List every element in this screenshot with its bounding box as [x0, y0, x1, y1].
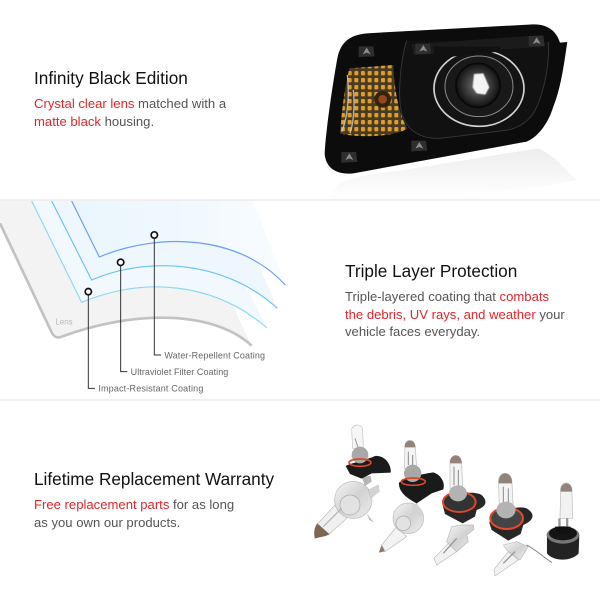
text: Infinity Black Edition body — [34, 96, 226, 129]
impact callout — [85, 288, 203, 394]
ultraviolet layer — [52, 201, 277, 308]
text: Lifetime Replacement Warranty body: as you own our products. — [34, 515, 180, 530]
bulb 5 with socket — [547, 483, 579, 560]
water layer — [72, 201, 285, 285]
lens layer — [0, 201, 252, 346]
H3 bulb — [494, 542, 552, 576]
text: Infinity Black Edition body: Crystal clear lens matched with a — [34, 96, 226, 111]
H4 medium bulb — [379, 503, 424, 553]
text: Infinity Black Edition body: matte black housing. — [34, 114, 154, 129]
water callout — [151, 232, 265, 360]
text: Triple Layer Protection body: vehicle faces everyday. — [345, 324, 480, 339]
section dividers — [0, 199, 600, 401]
amber marker — [374, 91, 391, 108]
H1 bulb — [434, 525, 474, 565]
mounting clips — [341, 36, 545, 163]
turn signal reflector — [340, 65, 407, 136]
text: Triple Layer Protection body — [345, 289, 565, 339]
H4 large bulb — [314, 481, 379, 539]
impact callout: Impact-Resistant Coating — [98, 384, 203, 394]
lens label: Lens — [55, 318, 73, 327]
headlight reflection — [332, 148, 577, 198]
text: Triple Layer Protection body: the debris, UV rays, and weather your — [345, 307, 565, 322]
text: Lifetime Replacement Warranty body — [34, 497, 234, 530]
headlight housing — [325, 24, 567, 174]
headlight photo — [325, 24, 577, 198]
projector lens — [456, 63, 500, 107]
upper trim bar — [412, 35, 545, 55]
impact layer — [32, 201, 267, 328]
text: Lifetime Replacement Warranty body: Free replacement parts for as long — [34, 497, 234, 512]
bulb 1 with socket — [346, 425, 391, 486]
heading: Infinity Black Edition: Infinity Black Edition — [34, 68, 188, 88]
bulbs photo — [314, 425, 579, 576]
bulb 4 with socket — [489, 473, 533, 541]
water callout: Water-Repellent Coating — [164, 350, 265, 360]
heading: Lifetime Replacement Warranty: Lifetime Replacement Warranty — [34, 469, 274, 489]
bulb 3 with socket — [443, 455, 485, 523]
bulb 2 with socket — [399, 440, 444, 503]
ultraviolet callout — [117, 259, 228, 377]
ultraviolet callout: Ultraviolet Filter Coating — [131, 367, 228, 377]
heading: Triple Layer Protection: Triple Layer Protection — [345, 261, 517, 281]
projector halo ring — [433, 47, 524, 126]
text: Triple Layer Protection body: Triple-layered coating that combats — [345, 289, 549, 304]
coating diagram — [0, 201, 285, 394]
